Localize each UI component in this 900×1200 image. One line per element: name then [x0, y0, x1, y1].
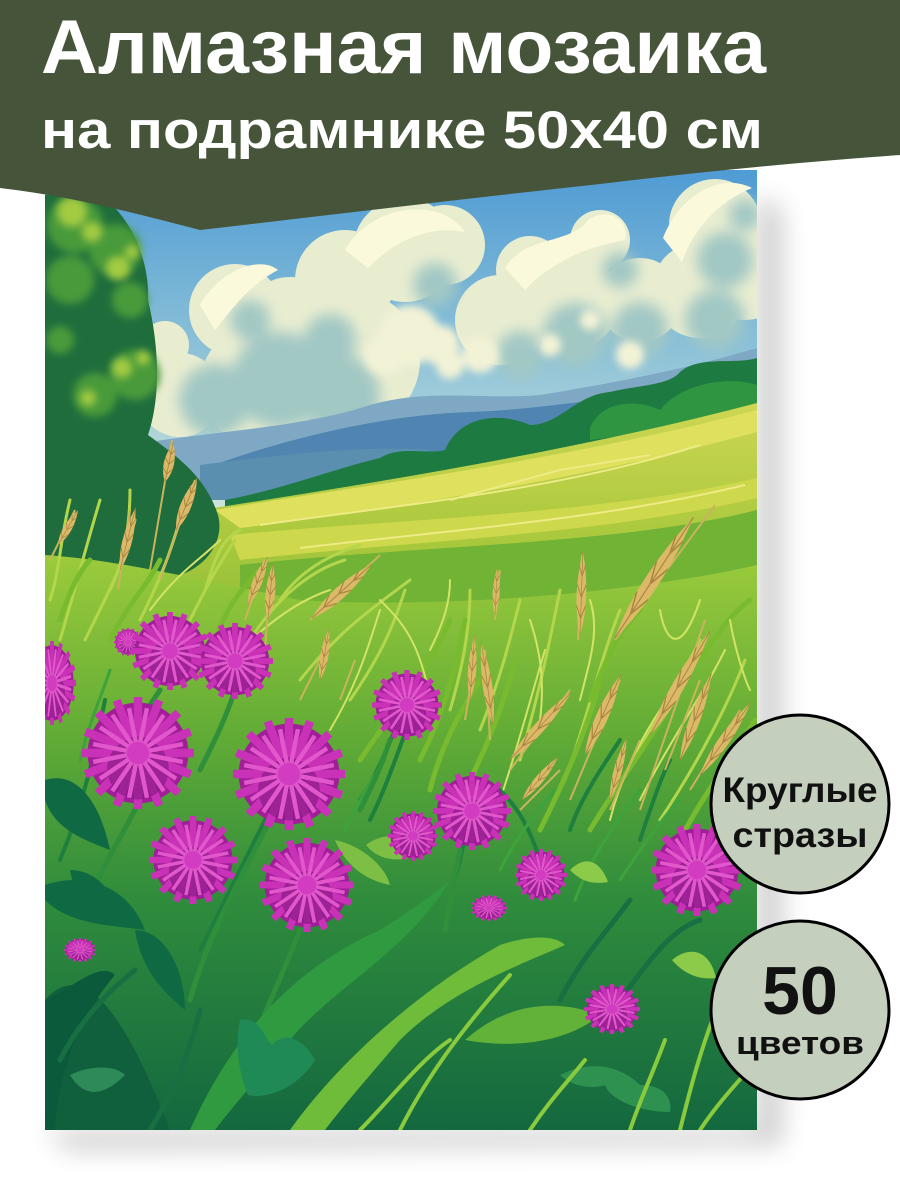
title: Алмазная мозаика: [41, 5, 767, 90]
clover flowers: [28, 612, 743, 1034]
title: на подрамнике 50х40 см: [41, 101, 763, 160]
tree on the left: [45, 195, 219, 580]
painting on canvas: [28, 170, 795, 1130]
mountains: [130, 348, 757, 500]
clouds: [151, 179, 757, 437]
stems and leaves: [45, 690, 757, 1130]
tree line: [225, 358, 757, 515]
foreground grass: [45, 490, 757, 1130]
badge: round rhinestones: [711, 715, 889, 893]
badge: 50 colours: [711, 921, 889, 1099]
badge: 50 colours: 50: [762, 953, 838, 1029]
badge: 50 colours: цветов: [736, 1025, 864, 1061]
sky: [45, 170, 757, 510]
header banner: [0, 0, 900, 230]
yellow-green field: [182, 403, 757, 603]
title: [41, 5, 767, 160]
badge: round rhinestones: Круглые: [722, 771, 878, 810]
wheat stalks: [50, 440, 755, 810]
badge: round rhinestones: стразы: [732, 816, 868, 855]
canvas shadow: [45, 195, 782, 1150]
